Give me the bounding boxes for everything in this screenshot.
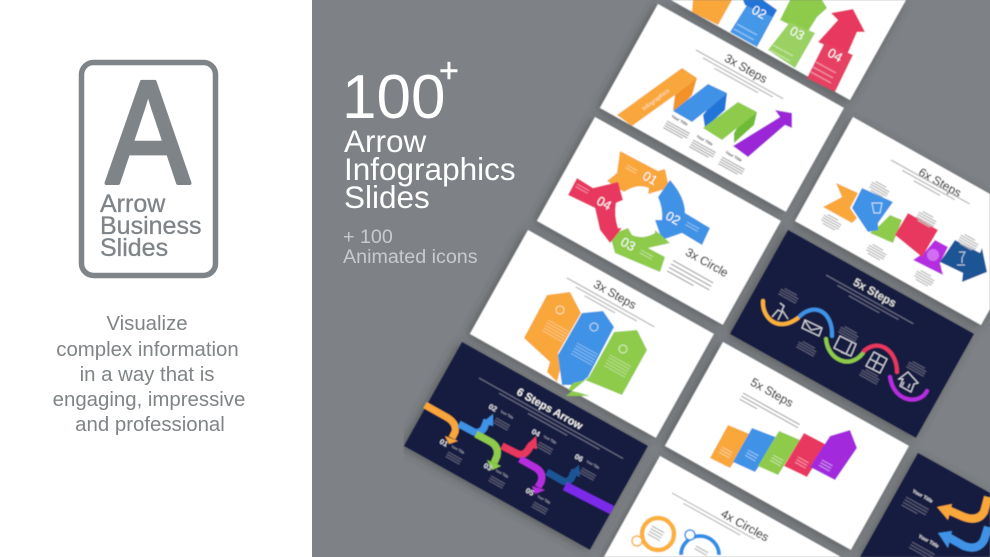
slide: 6x Steps bbox=[795, 117, 990, 325]
left white panel bbox=[0, 0, 312, 557]
slide: 6 Steps Arrow (dark): 06 bbox=[573, 452, 585, 464]
slide: 3x Circle bbox=[537, 117, 781, 325]
slide: 3x Circle: 03 bbox=[618, 234, 638, 254]
slide: dark arrows corner bbox=[860, 453, 990, 557]
tagline: complex information bbox=[56, 339, 239, 361]
logo wordmark: Slides bbox=[100, 234, 168, 262]
logo wordmark: Business bbox=[100, 212, 201, 240]
slide: 3x Steps ribbon: 3x Steps bbox=[722, 51, 770, 86]
icon: window bbox=[866, 352, 887, 373]
slide: 3x Steps ribbon: Infographics bbox=[642, 88, 671, 112]
icon: house bbox=[899, 372, 918, 392]
slide: 6 Steps Arrow (dark): 6 Steps Arrow bbox=[514, 386, 585, 433]
slide: 6 Steps Arrow (dark): 05 bbox=[524, 486, 536, 498]
tagline: engaging, impressive bbox=[53, 389, 245, 411]
icon: document bbox=[834, 336, 856, 356]
headline bbox=[342, 52, 516, 215]
slide: 4 up arrows: 04 bbox=[825, 45, 845, 65]
slide: 6 Steps Arrow (dark): Your Title bbox=[451, 444, 465, 455]
Arrow Infographics Slides: Arrow bbox=[344, 123, 427, 159]
tagline: and professional bbox=[75, 414, 225, 436]
subheadline: 100 animated icons: + 100 bbox=[343, 226, 393, 248]
slide: 5x Steps white: 5x Steps bbox=[748, 375, 796, 410]
slide: 3x Circle: 04 bbox=[594, 193, 614, 213]
slide: 6 Steps Arrow (dark): 01 bbox=[438, 437, 450, 449]
subheadline: 100 animated icons bbox=[343, 226, 478, 268]
icon: person bbox=[772, 303, 788, 320]
Arrow Infographics Slides: Slides bbox=[344, 179, 430, 215]
slide: 3x Steps tall arrows bbox=[470, 230, 714, 438]
logo frame bbox=[82, 62, 216, 276]
logo: Arrow Business Slides bbox=[82, 51, 216, 276]
slide: 3x Steps tall arrows: 3x Steps bbox=[591, 277, 639, 312]
slide: 3x Steps ribbon bbox=[600, 4, 844, 212]
slide: 5x Steps wave (dark): 5x Steps bbox=[851, 277, 898, 310]
100+: + bbox=[439, 52, 459, 90]
tagline bbox=[53, 313, 245, 436]
slide: 4 up arrows: 03 bbox=[787, 23, 807, 43]
slide: 3x Circle: 02 bbox=[663, 208, 683, 228]
logo wordmark: Arrow bbox=[100, 190, 166, 218]
Arrow Infographics Slides: Infographics bbox=[344, 151, 516, 187]
slide: 6 Steps Arrow (dark): 03 bbox=[482, 461, 494, 473]
slide collage bbox=[404, 0, 990, 557]
slide: 5x Steps white bbox=[665, 342, 909, 550]
slide: 6x Steps: 6x Steps bbox=[916, 165, 964, 200]
tagline: in a way that is bbox=[80, 364, 214, 386]
slide: 6 Steps Arrow (dark): Your Title bbox=[537, 494, 551, 505]
slide: 4 up arrows bbox=[671, 0, 906, 100]
slide: dark arrows corner: Your Title bbox=[917, 534, 940, 550]
slide: 4x Circles bbox=[604, 456, 841, 557]
slide: 3x Steps ribbon: Your Title bbox=[696, 134, 714, 147]
slide: 6 Steps Arrow (dark): 02 bbox=[487, 402, 499, 414]
slide: 6 Steps Arrow (dark): 04 bbox=[530, 427, 542, 439]
slide: dark arrows corner: Your Title bbox=[911, 489, 934, 505]
slide: 6 Steps Arrow (dark): Your Title bbox=[543, 434, 557, 445]
100+: 100 bbox=[342, 63, 445, 132]
slide: 6 Steps Arrow (dark): Your Title bbox=[495, 468, 509, 479]
subheadline: 100 animated icons: Animated icons bbox=[343, 246, 478, 268]
slide: 6 Steps Arrow (dark) bbox=[404, 342, 648, 550]
tagline: Visualize bbox=[106, 313, 188, 335]
Arrow Infographics Slides bbox=[344, 123, 516, 215]
slide: 4x Circles: 4x Circles bbox=[719, 507, 771, 544]
slide: 3x Steps ribbon: Your Title bbox=[671, 114, 689, 127]
slide: 3x Circle: 3x Circle bbox=[683, 245, 731, 280]
slide: 3x Circle: 01 bbox=[640, 168, 660, 188]
grey background bbox=[312, 0, 990, 557]
slide: 4 up arrows: 02 bbox=[749, 2, 769, 22]
slide: 6 Steps Arrow (dark): Your Title bbox=[586, 459, 600, 470]
slide: 3x Steps ribbon: Your Title bbox=[725, 150, 743, 163]
logo letter A: A bbox=[106, 51, 191, 215]
slide: 5x Steps wave (dark) bbox=[730, 230, 974, 438]
logo wordmark bbox=[100, 190, 201, 262]
slide: 6 Steps Arrow (dark): Your Title bbox=[500, 409, 514, 420]
icon: envelope bbox=[802, 320, 822, 336]
